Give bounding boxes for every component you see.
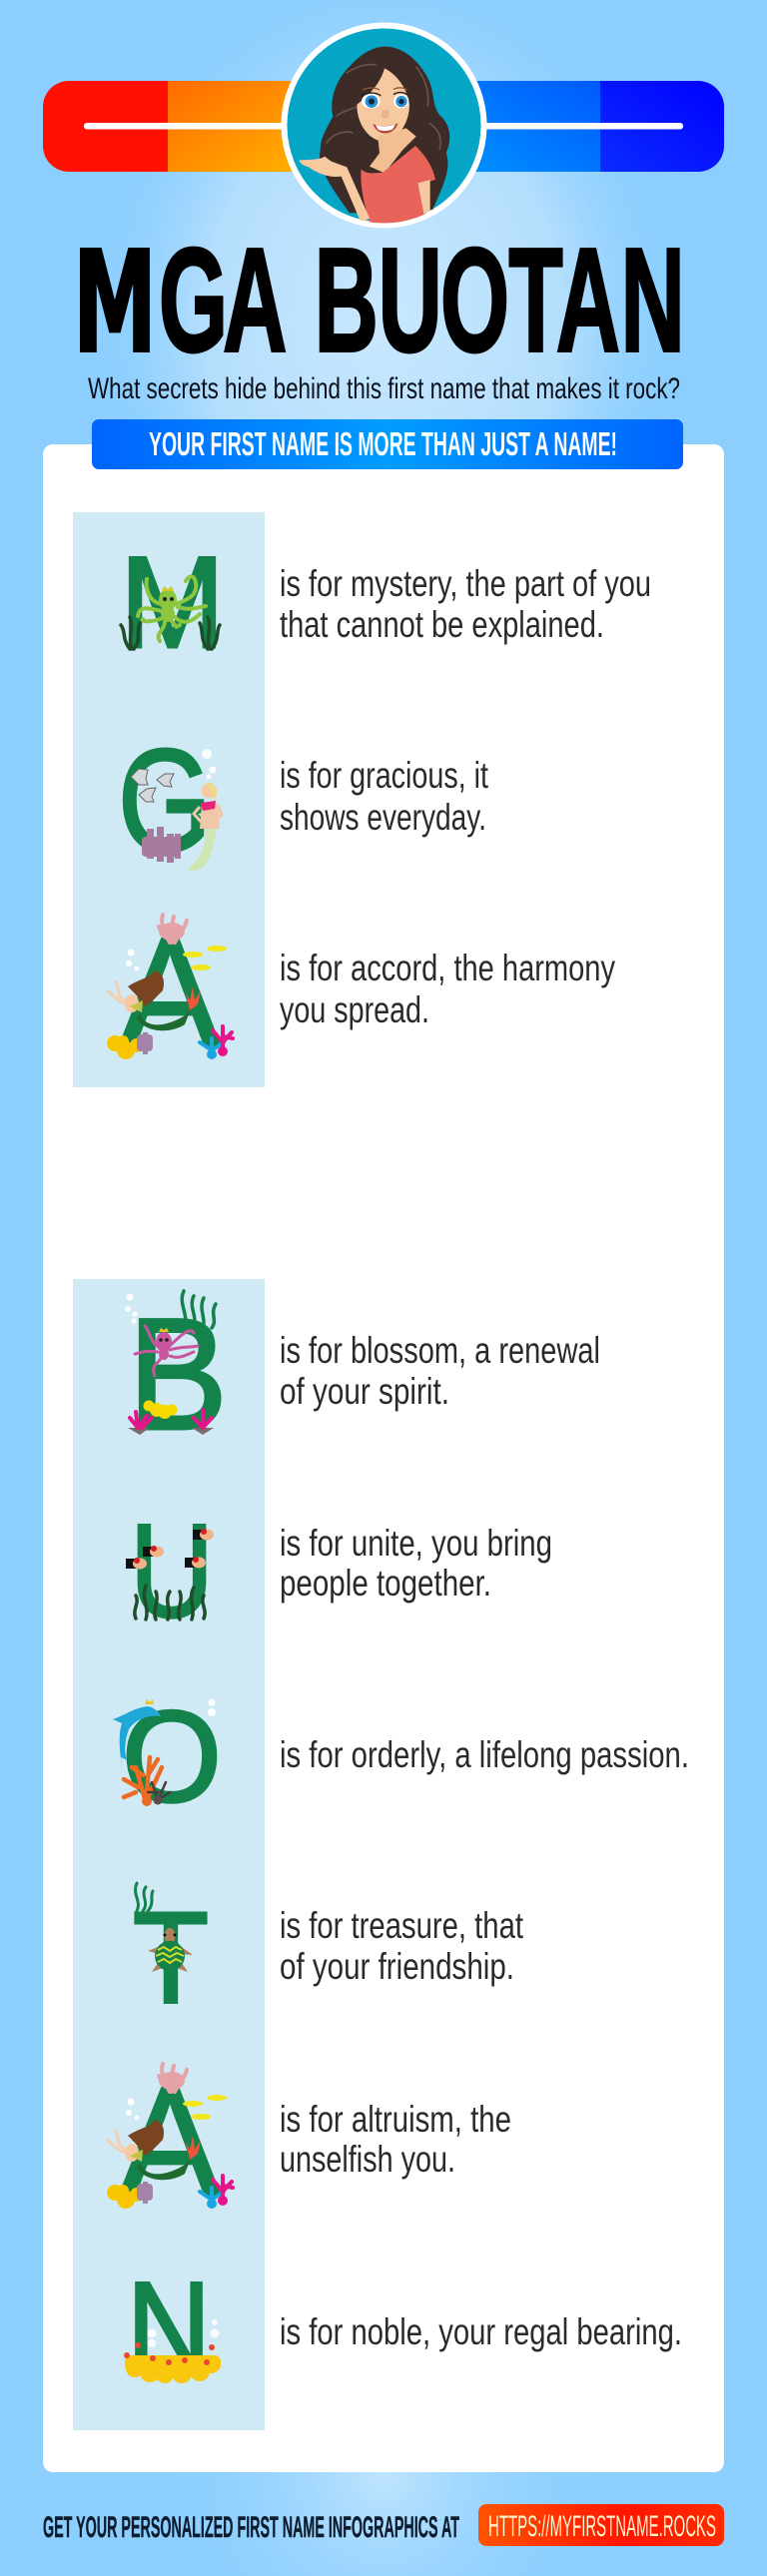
text: G line: shows everyday.: [280, 797, 486, 838]
avatar portrait: [284, 26, 483, 226]
text: G line: [280, 755, 489, 838]
letter O with dolphin: O: [122, 1683, 222, 1829]
text: A line: you spread.: [280, 989, 429, 1030]
text: B line: is for blossom, a renewal: [280, 1330, 600, 1371]
text: U line: is for unite, you bring: [280, 1523, 552, 1564]
text: A second line: is for altruism, the: [280, 2099, 511, 2140]
header bar: [43, 81, 724, 172]
footer url button: [478, 2504, 724, 2546]
letter M with octopus: M: [120, 529, 225, 675]
letter A with mermaid: A: [120, 906, 221, 1078]
letter A second with mermaid: A: [120, 2055, 221, 2228]
letter G with mermaid: G: [118, 719, 212, 882]
text: U line: people together.: [280, 1563, 491, 1604]
text: T line: [280, 1905, 524, 1987]
text: A line: [280, 948, 615, 1030]
text: U line: [280, 1523, 552, 1604]
panel: white content card: [43, 444, 724, 2472]
letter T with turtle: T: [133, 1885, 209, 2031]
text: T line: of your friendship.: [280, 1946, 514, 1987]
letter N with coral: N: [127, 2254, 211, 2400]
text: A second line: [280, 2099, 511, 2180]
panel: letter column second word: [73, 1279, 265, 2430]
text: M line: is for mystery, the part of you: [280, 563, 651, 604]
text: B line: [280, 1330, 600, 1412]
letter B with octopus: B: [128, 1285, 228, 1463]
text: G line: is for gracious, it: [280, 755, 489, 796]
title: GA BUOTAN: [159, 218, 685, 382]
banner: [92, 419, 683, 469]
text: T line: is for treasure, that: [280, 1905, 524, 1946]
title: M: [73, 223, 157, 384]
text: A line: is for accord, the harmony: [280, 948, 615, 988]
text: M line: that cannot be explained.: [280, 604, 604, 645]
letter U with fish: U: [130, 1498, 214, 1645]
text: M line: [280, 563, 651, 645]
panel: letter column first word: [73, 512, 265, 1087]
text: B line: of your spirit.: [280, 1371, 449, 1412]
text: A second line: unselfish you.: [280, 2139, 455, 2180]
